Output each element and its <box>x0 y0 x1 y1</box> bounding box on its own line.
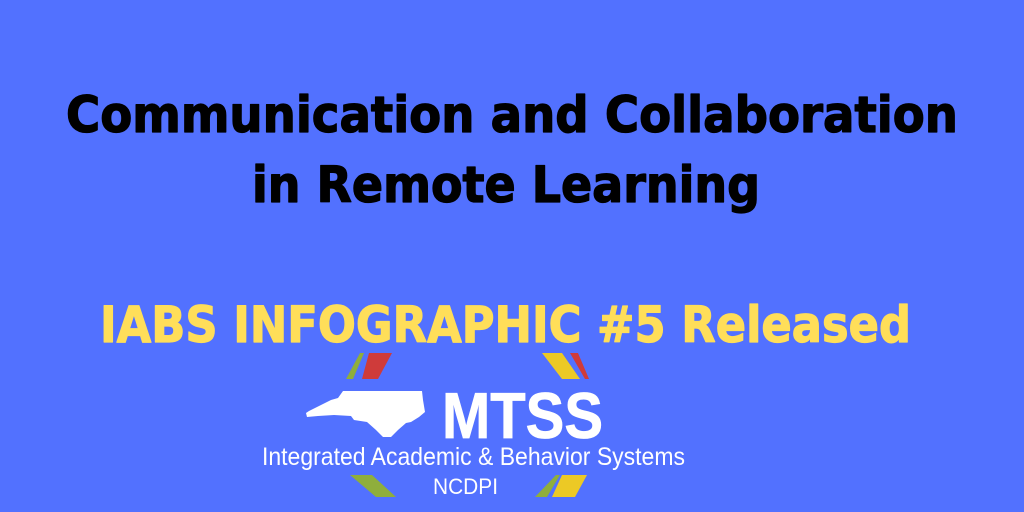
logo wordmark: MTSS <box>442 379 603 452</box>
subtitle: IABS INFOGRAPHIC #5 Released <box>100 296 911 354</box>
title: Communication and Collaboration <box>66 86 958 144</box>
logo organisation: NCDPI <box>433 474 498 499</box>
title: in Remote Learning <box>252 156 760 214</box>
title <box>66 86 958 214</box>
icon: logo colored ring segments <box>346 353 589 497</box>
logo tagline: Integrated Academic & Behavior Systems <box>262 443 685 471</box>
icon: North Carolina state outline <box>306 391 425 437</box>
logo: MTSS <box>262 353 685 499</box>
